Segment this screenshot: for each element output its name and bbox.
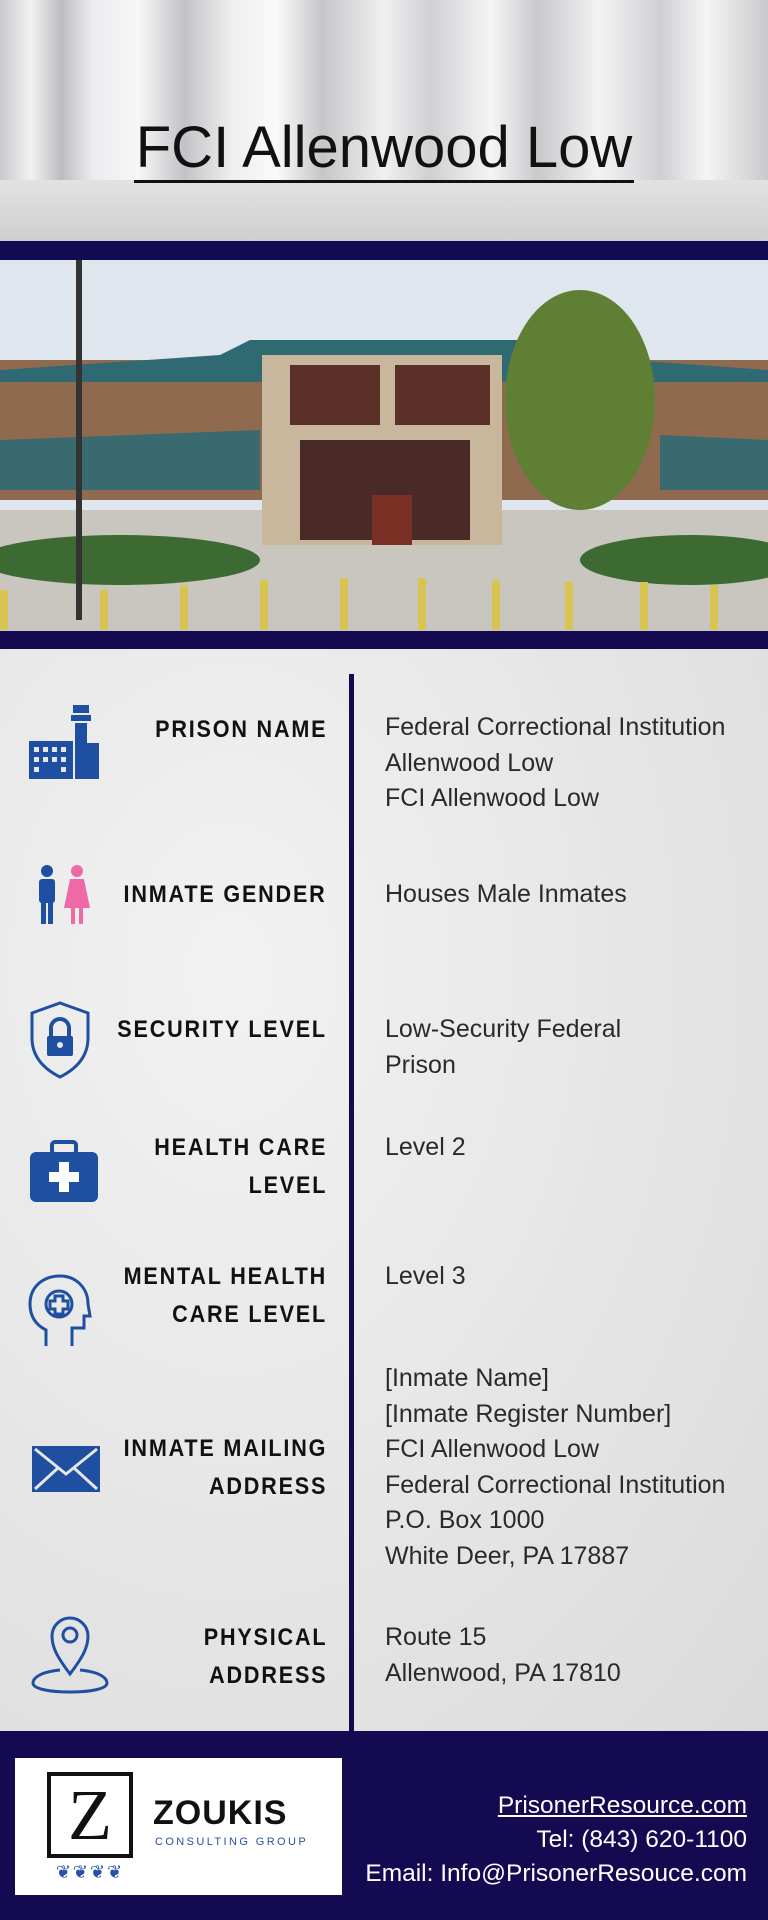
icon: shield lock [30,1001,90,1079]
photo of prison building [0,260,768,631]
value: mailing address: Federal Correctional Institution [385,1470,725,1498]
logo [15,1758,342,1895]
value: security: Prison [385,1050,456,1078]
value: physical address: Route 15 [385,1623,486,1651]
value: mailing address: [Inmate Register Number] [385,1400,671,1428]
value: mailing address: White Deer, PA 17887 [385,1542,629,1570]
label: physical address: PHYSICAL [203,1624,327,1651]
label: mental health care level: MENTAL HEALTH [124,1263,327,1290]
title: FCI Allenwood Low [136,115,632,180]
value: physical address: Allenwood, PA 17810 [385,1658,621,1686]
icon: envelope [32,1446,100,1492]
value: prison name: FCI Allenwood Low [385,784,599,812]
icon: location pin [32,1616,108,1694]
icon: gender [39,865,90,924]
logo: Z [68,1775,112,1855]
value: mailing address [385,1364,725,1570]
label: health care level: HEALTH CARE [154,1134,327,1161]
label: security level: SECURITY LEVEL [117,1016,327,1043]
contact info: PrisonerResource.com [498,1792,747,1819]
value: security [385,1015,621,1078]
label: inmate mailing address [123,1435,327,1500]
value: mailing address: P.O. Box 1000 [385,1506,544,1534]
contact info [365,1792,747,1887]
value: gender: Houses Male Inmates [385,880,627,908]
icon: mental health head [28,1274,92,1346]
label: health care level [154,1134,327,1199]
header: columns background [0,0,768,241]
icon: medical kit [30,1140,98,1202]
label: physical address [203,1624,327,1689]
icon: prison building [29,705,99,779]
contact info: Email: Info@PrisonerResouce.com [365,1860,747,1887]
label: prison name: PRISON NAME [155,716,327,743]
label: health care level: LEVEL [248,1172,327,1199]
value: prison name: Allenwood Low [385,748,553,776]
label: inmate mailing address: ADDRESS [209,1473,327,1500]
value: mailing address: FCI Allenwood Low [385,1435,599,1463]
logo: ❦❦❦❦ [56,1862,124,1882]
logo: ZOUKIS [153,1794,287,1832]
label: mental health care level [124,1263,327,1328]
label: physical address: ADDRESS [209,1662,327,1689]
label: inmate mailing address: INMATE MAILING [123,1435,327,1462]
footer [0,1731,768,1920]
navy band [0,241,768,260]
label: mental health care level: CARE LEVEL [172,1301,327,1328]
value: physical address [385,1623,621,1686]
value: prison name [385,713,725,812]
value: mailing address: [Inmate Name] [385,1364,549,1392]
label: inmate gender: INMATE GENDER [124,881,327,908]
navy band [0,631,768,649]
value: prison name: Federal Correctional Institution [385,713,725,741]
content panel [0,649,768,1731]
logo: CONSULTING GROUP [155,1836,308,1848]
value: health care: Level 2 [385,1133,466,1161]
value: security: Low-Security Federal [385,1015,621,1043]
contact info: Tel: (843) 620-1100 [536,1826,747,1853]
value: mental health: Level 3 [385,1262,466,1290]
